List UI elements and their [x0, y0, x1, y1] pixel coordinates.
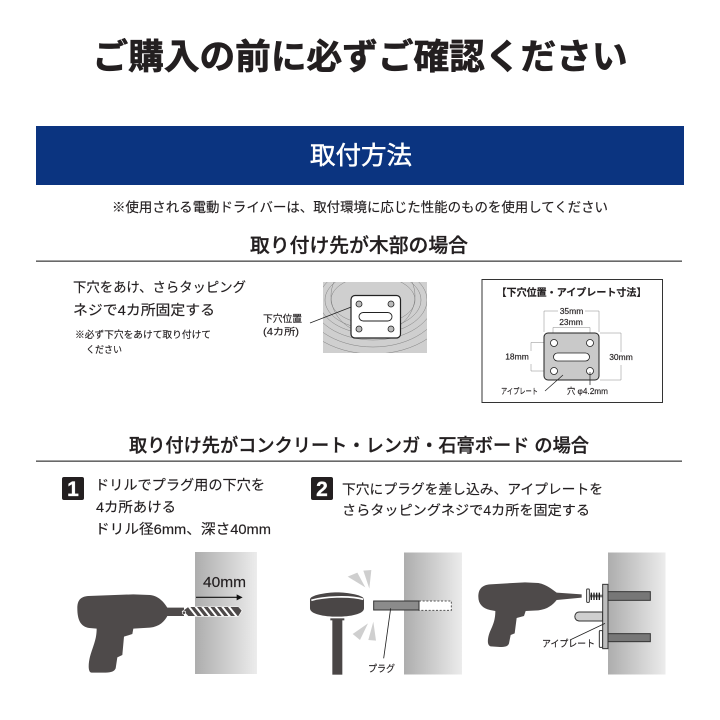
- dimension plate: [544, 333, 599, 380]
- fixed screw head: [599, 631, 603, 647]
- plate callouts: [501, 372, 608, 396]
- label: pilot hole position: 下穴位置: [263, 312, 302, 325]
- step 2 text: さらタッピングネジで4カ所を固定する: [342, 503, 590, 518]
- wall: [195, 552, 257, 674]
- label: pilot hole position: (4カ所): [263, 325, 299, 338]
- title: ご購入の前に必ずご確認ください: [92, 38, 628, 77]
- plug hole: [419, 601, 451, 610]
- anchors in wall: [608, 592, 650, 642]
- plug: [374, 601, 419, 610]
- depth label: 40mm: [203, 574, 246, 591]
- step 1 badge: [62, 477, 84, 501]
- dimension labels: 35mm: [560, 306, 583, 316]
- eye plate label: アイプレート: [542, 639, 595, 650]
- step 1 text: 4カ所あける: [96, 499, 176, 515]
- plug label: プラグ: [368, 663, 395, 675]
- depth arrow: [196, 594, 243, 600]
- dimension labels: [505, 306, 633, 362]
- screw: [587, 589, 603, 602]
- dimension labels: 23mm: [559, 317, 583, 327]
- banner: 取付方法: 取付方法: [310, 142, 412, 170]
- eye plate leader: [570, 623, 605, 640]
- wall: [404, 552, 462, 674]
- step 1 text: ドリル径6mm、深さ40mm: [95, 521, 271, 537]
- eye plate side view: [603, 584, 608, 649]
- illustration: screwing the plate: [478, 552, 666, 674]
- impact rays: [348, 570, 376, 641]
- step 2 badge: [311, 477, 333, 501]
- panel: plate dimensions: [482, 280, 662, 402]
- plate: [351, 296, 400, 338]
- drill bit: [182, 606, 243, 617]
- step 1 badge: 1: [67, 478, 79, 501]
- plate callouts: 穴 φ4.2mm: [567, 386, 608, 396]
- note: driver performance: ※使用される電動ドライバーは、取付環境に応じた性能のものを使用してください: [112, 199, 608, 215]
- illustration: drilling the wall: [77, 552, 257, 674]
- dimension labels: 30mm: [609, 352, 633, 362]
- leader line: [310, 304, 359, 323]
- text block: wood caution: [75, 328, 211, 356]
- dimensions title: 【下穴位置・アイプレート寸法】: [496, 286, 646, 299]
- step 2 badge: 2: [316, 478, 328, 501]
- illustration: plate on wood: [310, 282, 427, 353]
- plate callouts: アイプレート: [501, 387, 538, 396]
- illustration: hammering the plug: [310, 552, 462, 675]
- wall: [608, 552, 666, 674]
- driver body: [478, 582, 582, 647]
- plug to insert: [575, 612, 603, 621]
- text block: wood instructions: [73, 280, 246, 318]
- text block: wood caution: ください: [86, 344, 122, 356]
- text block: wood caution: ※必ず下穴をあけて取り付けて: [75, 328, 211, 341]
- label: pilot hole position: [263, 312, 302, 338]
- dimension lines: [531, 311, 621, 380]
- step 2 text: 下穴にプラグを差し込み、アイプレートを: [342, 482, 603, 497]
- step 1 text: ドリルでプラグ用の下穴を: [95, 477, 265, 493]
- plug leader: [384, 608, 391, 658]
- step 1 text: [95, 477, 271, 537]
- text block: wood instructions: ネジで4カ所固定する: [73, 302, 215, 318]
- dimension labels: 18mm: [505, 352, 529, 362]
- drill body: [77, 594, 184, 673]
- hammer: [310, 592, 364, 675]
- heading: concrete, brick, plasterboard: 取り付け先がコンクリート・レンガ・石膏ボード の場合: [129, 435, 589, 456]
- text block: wood instructions: 下穴をあけ、さらタッピング: [73, 280, 246, 295]
- heading: wood: 取り付け先が木部の場合: [250, 235, 468, 257]
- step 2 text: [342, 482, 603, 518]
- banner: 取付方法: [36, 126, 684, 185]
